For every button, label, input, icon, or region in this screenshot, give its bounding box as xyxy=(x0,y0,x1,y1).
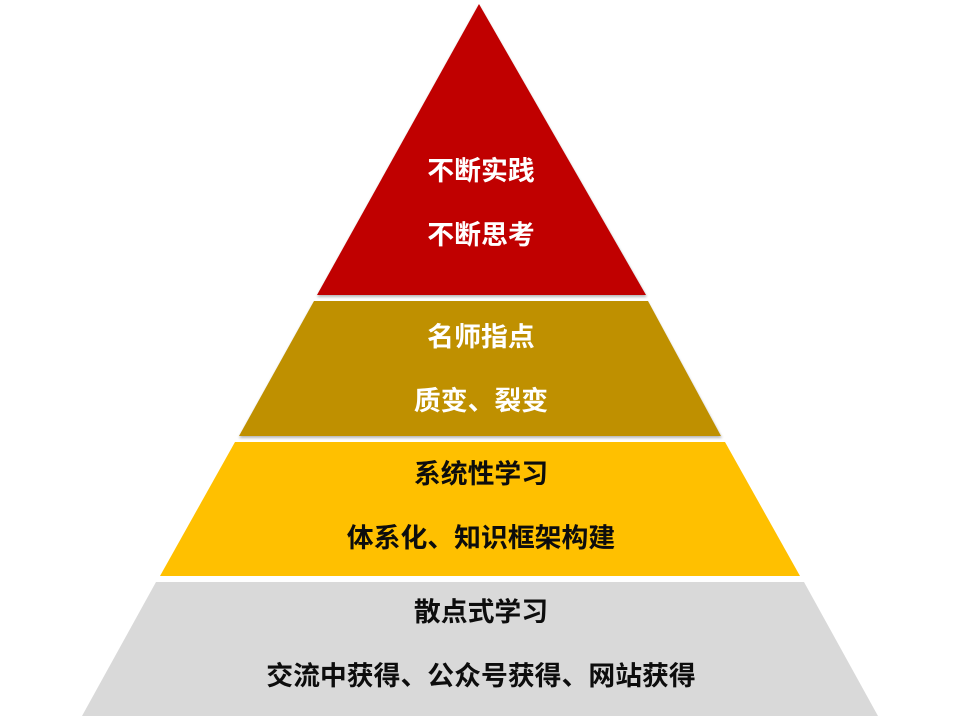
tier 3: yellow band xyxy=(160,442,800,576)
tier 2 line 1: 名师指点 xyxy=(427,322,535,352)
tier 3 line 1: 系统性学习 xyxy=(414,459,548,489)
tier 2 line 2: 质变、裂变 xyxy=(414,386,548,416)
tier 4 line 1: 散点式学习 xyxy=(414,597,548,627)
tier 1 line 1: 不断实践 xyxy=(427,156,535,186)
tier 3 line 2: 体系化、知识框架构建 xyxy=(347,523,615,553)
tier 2: gold band xyxy=(239,301,722,438)
tier 1: red apex xyxy=(317,4,647,297)
tier 4: grey base xyxy=(82,582,878,716)
tier 4 line 2: 交流中获得、公众号获得、网站获得 xyxy=(266,661,696,691)
tier 1 line 2: 不断思考 xyxy=(427,220,535,250)
